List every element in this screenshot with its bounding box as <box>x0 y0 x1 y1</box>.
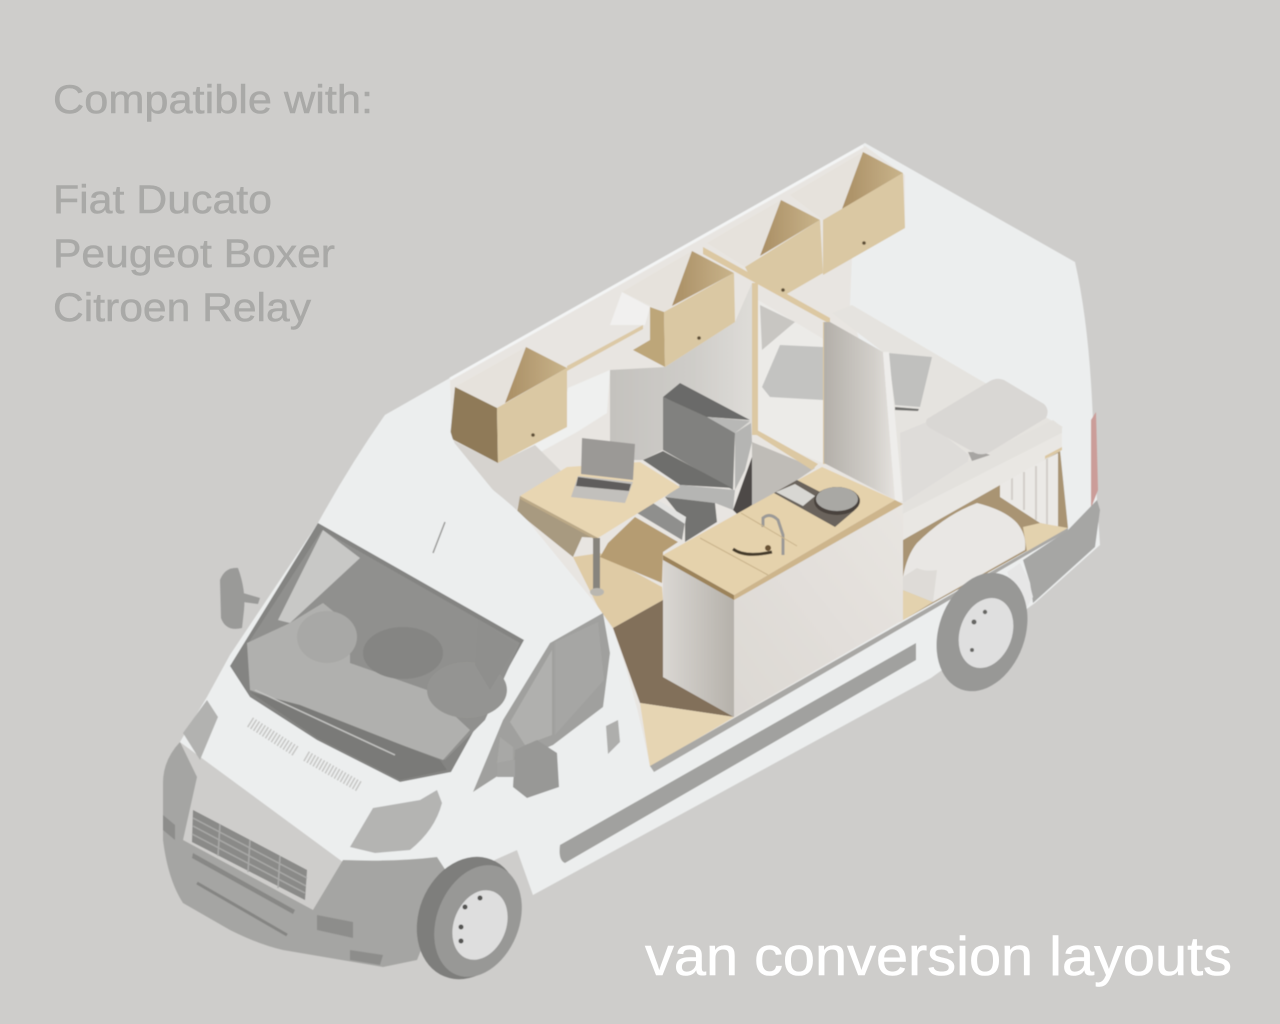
upper cabinet 4 <box>790 152 905 275</box>
text block: compatible vehicles <box>53 78 373 330</box>
bed mattress <box>900 422 969 503</box>
red tail light <box>1091 412 1098 508</box>
upper cabinet 3 <box>707 200 823 295</box>
sink tap <box>700 513 797 575</box>
text block: compatible vehicles: Peugeot Boxer <box>53 232 335 276</box>
wardrobe base behind kitchen <box>752 442 815 510</box>
bed platform edge <box>903 420 1062 540</box>
upper cabinet 1 <box>450 347 567 463</box>
bumper lamps <box>163 815 383 965</box>
laptop <box>571 438 635 503</box>
right door mirror <box>497 737 559 798</box>
side protection strip <box>560 643 916 863</box>
floor edge sill <box>650 528 1068 772</box>
door handle <box>606 720 620 754</box>
left door mirror <box>220 568 260 629</box>
window in side wall <box>517 370 610 455</box>
grille <box>192 810 307 935</box>
worktop <box>663 467 895 595</box>
antenna <box>433 522 445 553</box>
text block: compatible vehicles: Compatible with: <box>53 78 373 122</box>
left headlight <box>183 700 218 760</box>
kitchen block <box>663 467 903 717</box>
rear wheel arch highlight <box>1007 563 1033 610</box>
cushion behind partition right <box>888 353 932 411</box>
wall under the cabinets <box>452 440 570 512</box>
upper cabinet 2 <box>610 251 735 367</box>
front cab shell with cut line <box>180 378 654 895</box>
roof cut edge line <box>450 146 863 379</box>
front wheel <box>399 841 538 995</box>
interior back wall <box>450 146 905 767</box>
rear bumper <box>1023 500 1100 603</box>
wooden door frame <box>703 247 830 470</box>
hood vents <box>250 722 360 787</box>
side window <box>473 613 610 792</box>
title: van conversion layouts <box>645 925 1232 987</box>
bed pillow <box>926 379 1048 454</box>
hanging rail <box>567 325 643 371</box>
hob and pan <box>774 480 860 527</box>
partition wall <box>824 322 903 505</box>
cab wall behind bench <box>610 283 752 460</box>
rear wheel <box>921 560 1043 704</box>
desk table with leg <box>520 462 680 596</box>
van body shell <box>180 143 1100 895</box>
windshield <box>230 523 524 782</box>
bed seen through the frame <box>758 300 825 464</box>
illustration: cutaway van <box>163 143 1100 995</box>
bench seat and backrest <box>637 383 752 542</box>
text block: compatible vehicles: Fiat Ducato <box>53 178 272 222</box>
right headlight <box>350 790 442 853</box>
front bumper <box>163 742 450 967</box>
dark recess behind bench <box>733 457 752 515</box>
floor <box>517 496 734 767</box>
text block: compatible vehicles: Citroen Relay <box>53 286 311 330</box>
under-bed storage <box>900 450 1068 622</box>
bed back surface <box>832 305 1063 510</box>
